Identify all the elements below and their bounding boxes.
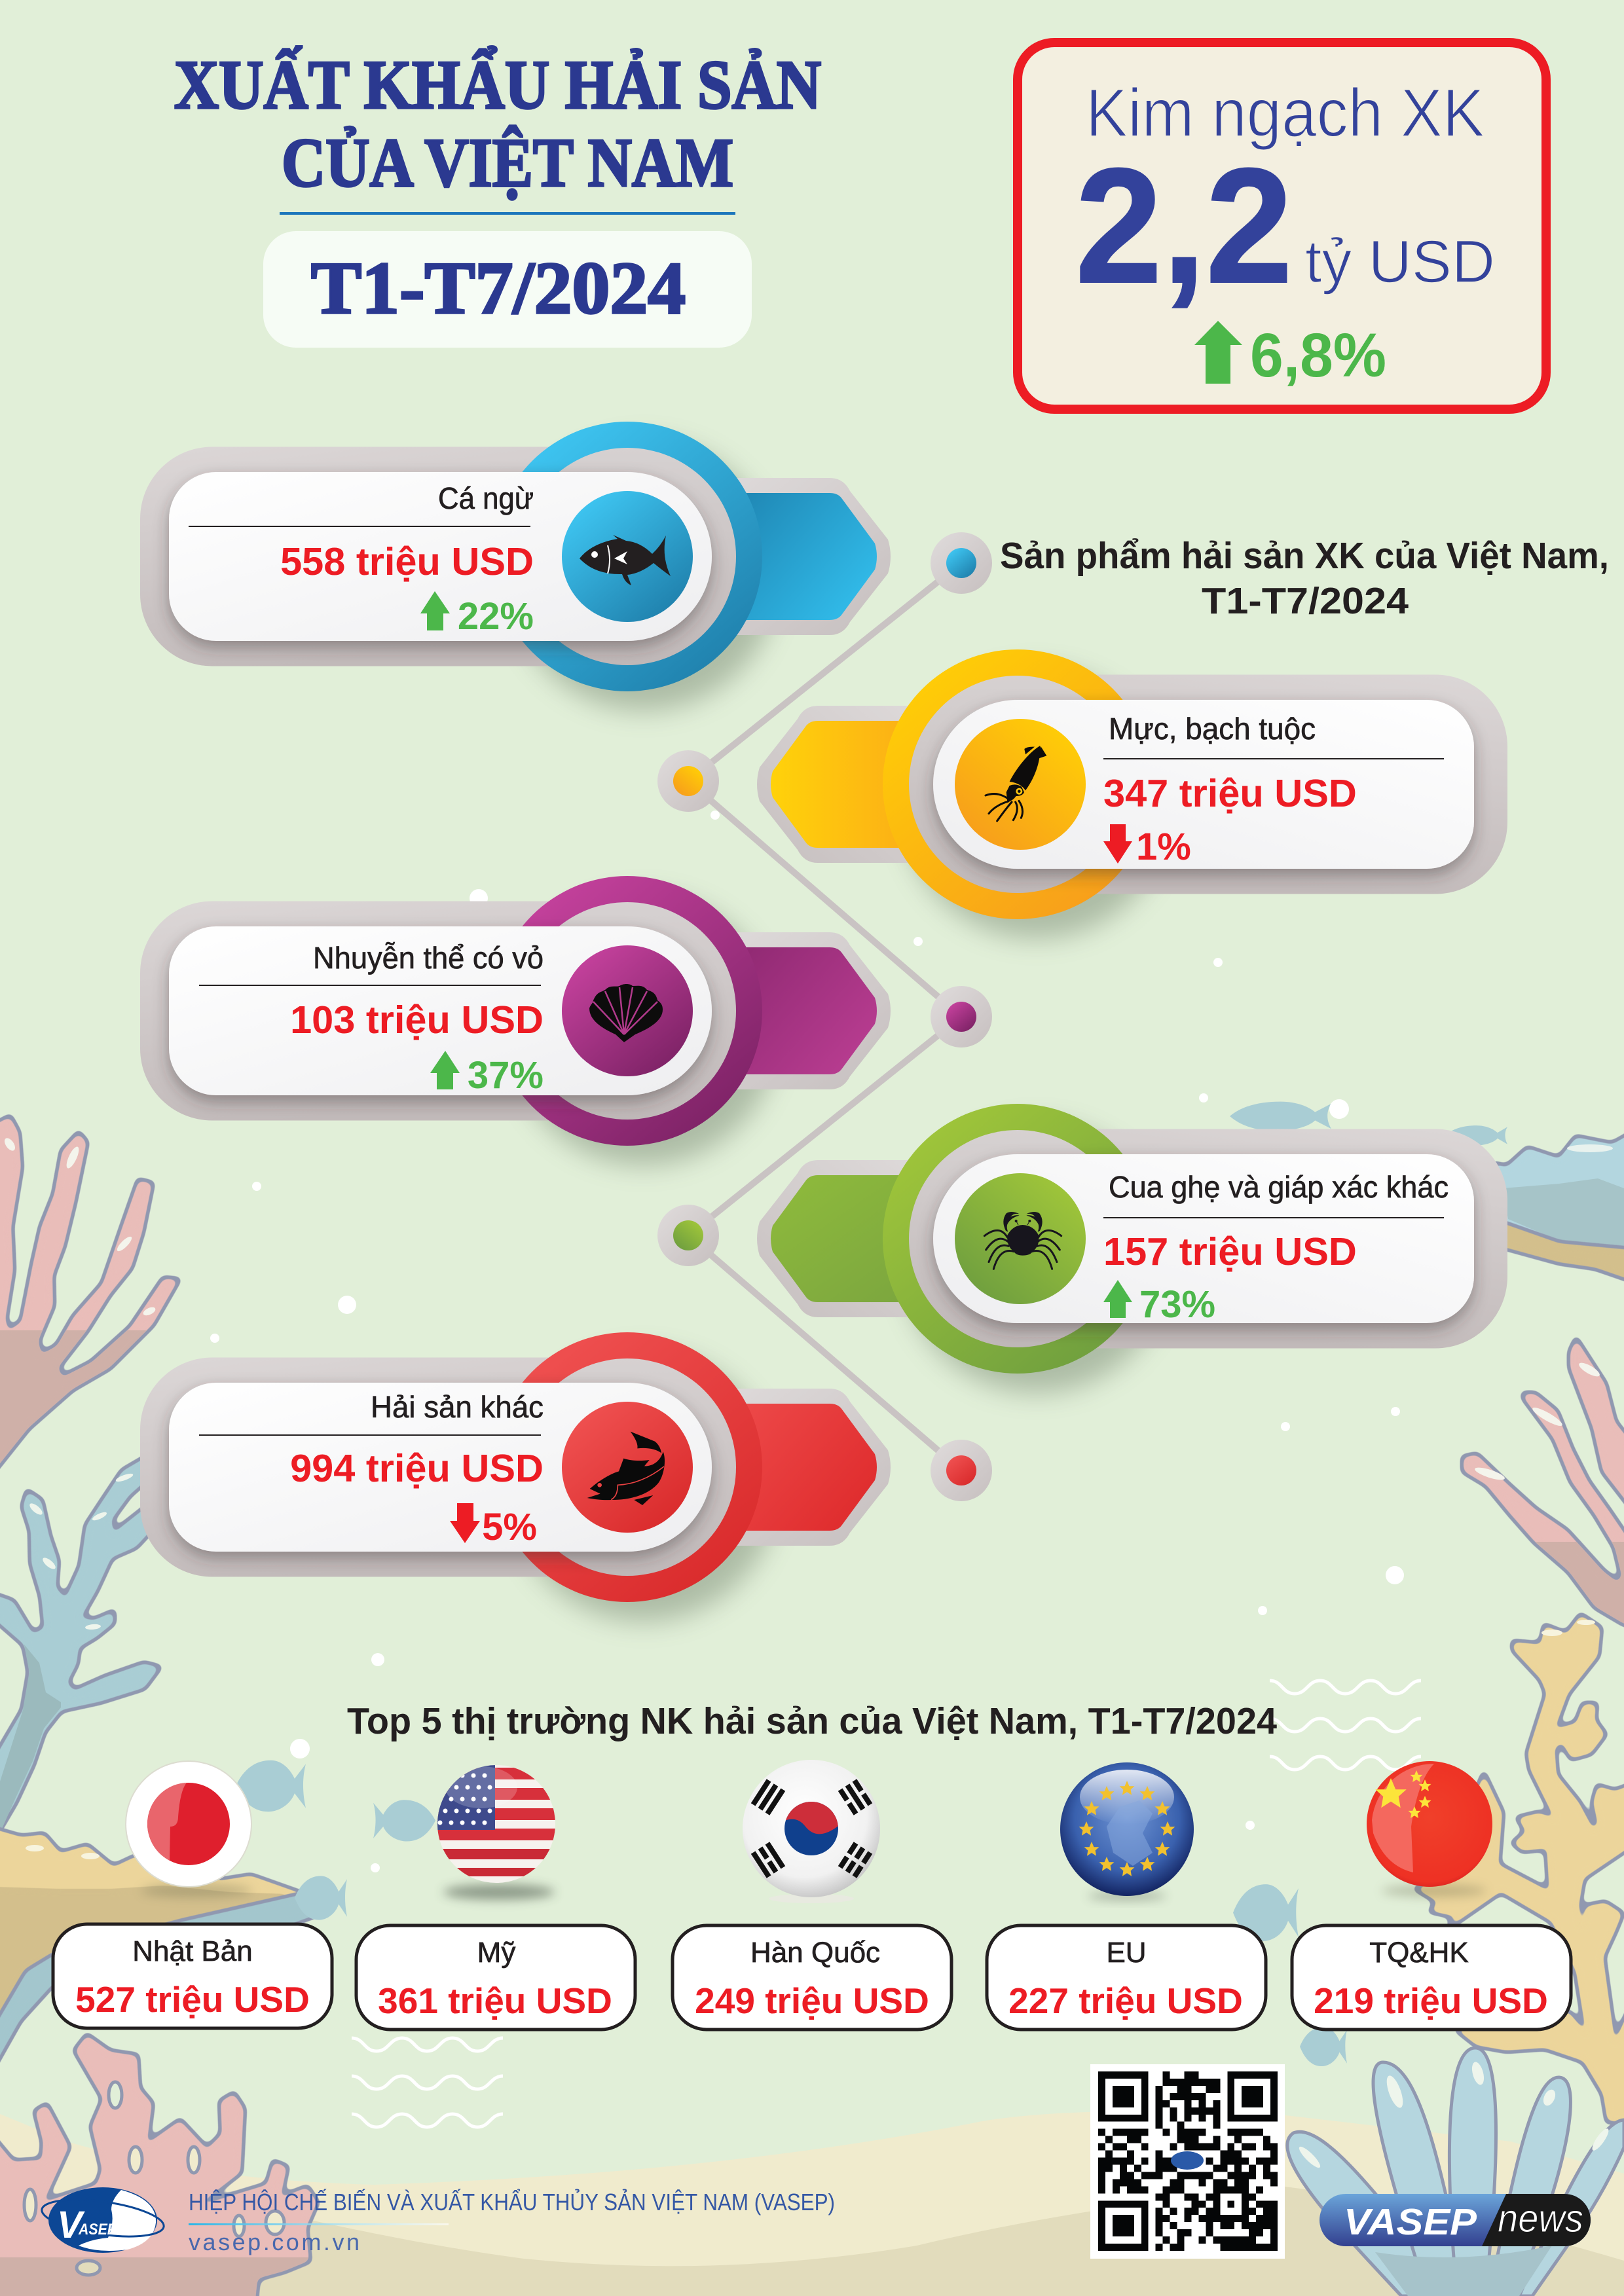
flag: EU	[1060, 1762, 1194, 1900]
logo: VASEP: ASEP	[78, 2221, 117, 2238]
label: Cua ghẹ và giáp xác khác	[1109, 1170, 1449, 1204]
market box: Nhật Bản: Nhật Bản	[132, 1935, 253, 1967]
market box: Hàn Quốc: Hàn Quốc	[750, 1937, 880, 1969]
flag: Japan	[126, 1761, 252, 1897]
label: Kim ngạch XK: Kim ngạch XK	[1086, 75, 1485, 151]
background fish	[236, 1102, 1507, 2066]
logo: VASEP: V	[57, 2204, 85, 2246]
market box: Nhật Bản: 527 triệu USD	[75, 1979, 310, 2020]
card: Nhuyễn thể có vỏ	[140, 876, 891, 1165]
market box: TQ&amp;HK	[1292, 1925, 1571, 2030]
icon: fish	[587, 1432, 665, 1505]
heading: products: T1-T7/2024	[1202, 580, 1409, 622]
market box: EU	[987, 1925, 1266, 2030]
change: 73%	[1139, 1283, 1215, 1326]
icon: shell	[589, 984, 663, 1042]
coral: pink right	[1464, 1339, 1624, 1630]
coral: yellow right	[1416, 1615, 1624, 2121]
arrow up	[1194, 321, 1242, 384]
title	[174, 46, 821, 215]
card: Cá ngừ	[140, 422, 891, 711]
footer: organisation	[189, 2188, 835, 2255]
title: CỦA VIỆT NAM	[282, 124, 733, 201]
icon: squid	[986, 746, 1046, 821]
sand hills	[0, 2111, 1624, 2296]
market box: TQ&amp;HK: TQ&HK	[1369, 1937, 1469, 1969]
card: Mực, bạch tuộc	[757, 649, 1507, 939]
connector node: purple	[931, 986, 992, 1048]
number: 2,2: 2,2	[1075, 134, 1293, 317]
value: 157 triệu USD	[1103, 1230, 1357, 1273]
heading: products	[1000, 535, 1609, 622]
heading: top 5 markets: Top 5 thị trường NK hải sản của Việt Nam, T1-T7/2024	[347, 1700, 1277, 1742]
flag: South Korea	[743, 1760, 880, 1903]
icon: tuna	[580, 535, 671, 585]
connector node: blue	[931, 532, 992, 594]
connector node: yellow	[657, 750, 719, 812]
arrow up	[1103, 1280, 1132, 1318]
growth 6,8%: 6,8%	[1250, 321, 1386, 390]
heading: products: Sản phẩm hải sản XK của Việt Nam,	[1000, 535, 1609, 577]
period pill	[263, 231, 752, 348]
value: 994 triệu USD	[290, 1446, 544, 1490]
card: Cua ghẹ và giáp xác khác	[757, 1104, 1507, 1393]
icon: crab	[984, 1212, 1061, 1269]
market box: TQ&amp;HK: 219 triệu USD	[1314, 1980, 1548, 2021]
coral: blue top right	[1494, 1123, 1624, 1286]
label: Hải sản khác	[371, 1390, 544, 1424]
waves	[352, 1681, 1421, 2127]
coral: pink bottom left	[0, 2035, 317, 2296]
connector node: red	[931, 1440, 992, 1501]
market box: Mỹ: Mỹ	[477, 1937, 515, 1969]
footer: organisation: vasep.com.vn	[189, 2229, 360, 2255]
arrow down	[1103, 824, 1132, 864]
coral: blue left	[0, 1455, 159, 1872]
change: 22%	[458, 595, 534, 638]
label: Cá ngừ	[438, 481, 534, 515]
badge: VASEP news: VASEP	[1344, 2201, 1477, 2243]
coral: blue anemone bottom right	[1287, 2048, 1624, 2296]
market box: EU: 227 triệu USD	[1008, 1980, 1243, 2021]
badge: VASEP news: news	[1498, 2196, 1583, 2240]
label: Mực, bạch tuộc	[1109, 712, 1316, 746]
card: Hải sản khác	[140, 1332, 891, 1622]
market box: Hàn Quốc	[673, 1925, 951, 2030]
change: 5%	[482, 1506, 537, 1548]
QR code	[1090, 2064, 1285, 2259]
flag: China	[1367, 1761, 1492, 1897]
arrow down	[450, 1503, 480, 1543]
arrow up	[430, 1051, 460, 1089]
footer: organisation: HIỆP HỘI CHẾ BIẾN VÀ XUẤT KHẨU THỦY SẢN VIỆT NAM (VASEP)	[189, 2188, 835, 2215]
logo: VASEP	[39, 2187, 166, 2253]
change: 37%	[468, 1054, 544, 1097]
bubbles	[210, 811, 1404, 1872]
connector node: green	[657, 1205, 719, 1266]
panel: export turnover	[1018, 43, 1546, 409]
badge: VASEP news	[1320, 2194, 1591, 2246]
connector line	[688, 563, 961, 1470]
coral: yellow left blob	[0, 1823, 324, 2102]
label: Nhuyễn thể có vỏ	[313, 941, 544, 975]
flag: USA	[437, 1765, 555, 1900]
title: XUẤT KHẨU HẢI SẢN	[174, 46, 821, 123]
market box: Hàn Quốc: 249 triệu USD	[695, 1980, 929, 2021]
change: 1%	[1136, 826, 1191, 868]
coral: pink top left	[0, 1117, 178, 1496]
value: 558 triệu USD	[280, 539, 534, 583]
market box: Mỹ: 361 triệu USD	[378, 1980, 612, 2021]
market box: Nhật Bản	[53, 1924, 332, 2028]
period pill: T1-T7/2024	[311, 247, 686, 329]
arrow up	[420, 591, 450, 630]
value: 103 triệu USD	[290, 998, 544, 1042]
value: 347 triệu USD	[1103, 771, 1357, 815]
unit: tỷ USD: tỷ USD	[1305, 228, 1495, 295]
market box: Mỹ	[356, 1925, 635, 2030]
market box: EU: EU	[1106, 1937, 1147, 1969]
